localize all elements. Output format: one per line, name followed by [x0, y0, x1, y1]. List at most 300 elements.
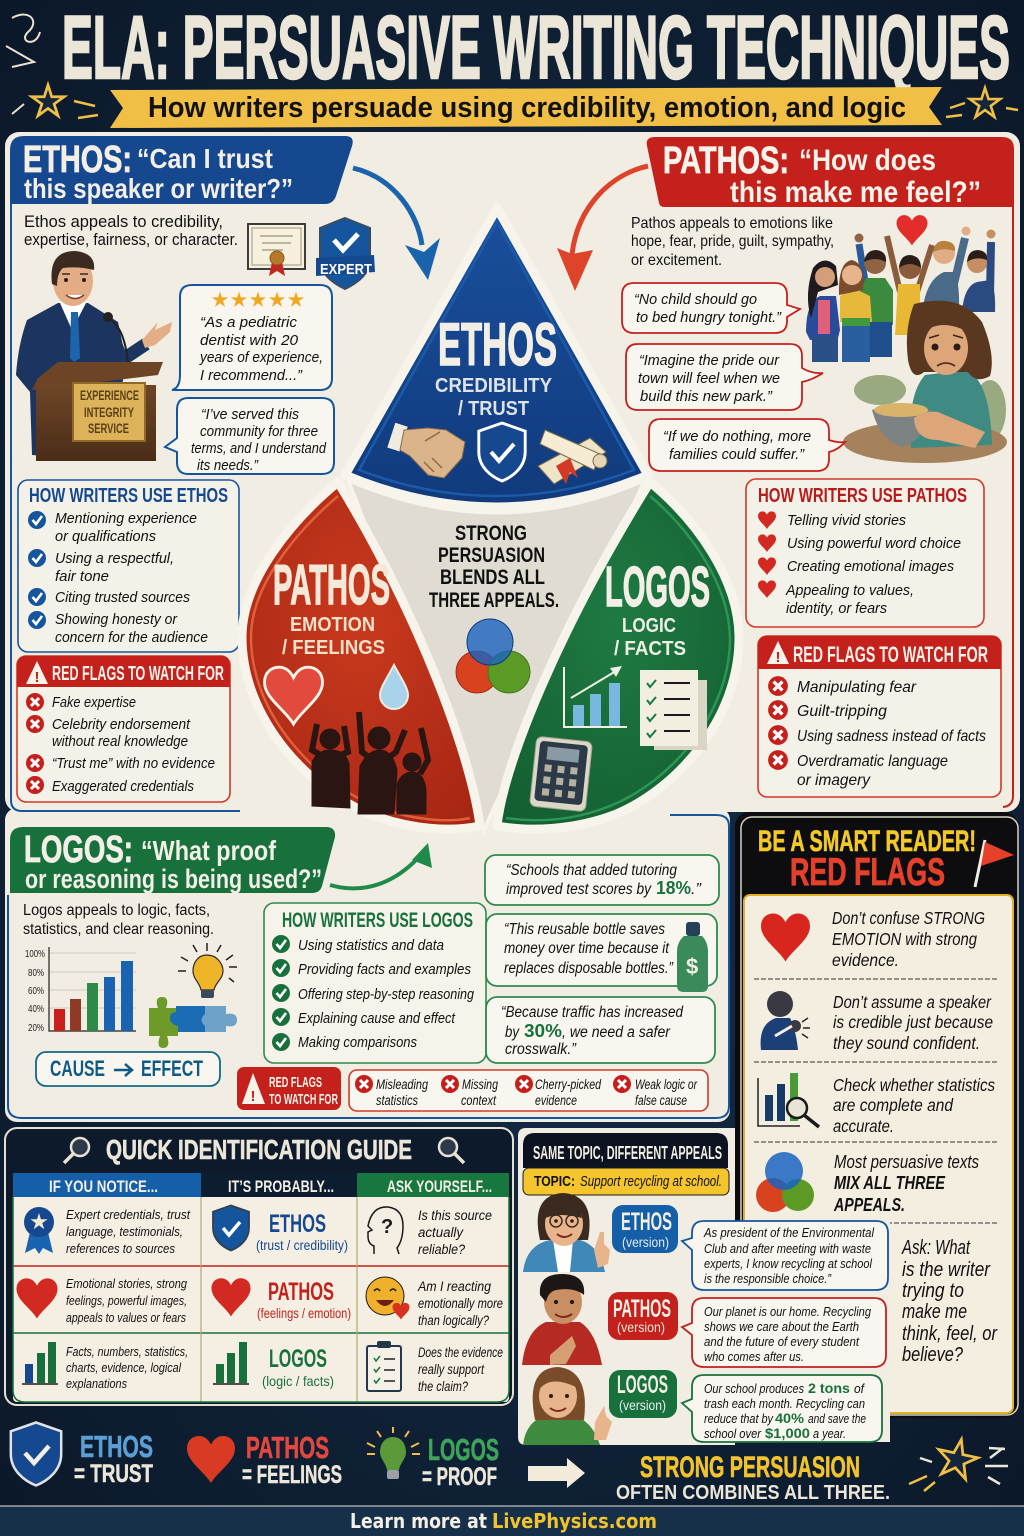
box: ethos red flags: Fake expertise: [52, 694, 136, 711]
same topic header: [523, 1133, 728, 1168]
segment: logos leaf: [497, 482, 739, 829]
icon: magnifier right: [439, 1138, 464, 1163]
icon: rising bar chart: [564, 666, 627, 727]
badge: ethos version: ETHOS: [621, 1208, 672, 1236]
icon: check shield: [479, 423, 525, 481]
tip: emotion: evidence.: [832, 950, 899, 970]
box: how writers use logos: Using statistics and data: [298, 937, 444, 954]
tip: emotion: [832, 908, 985, 970]
ask question: believe?: [902, 1344, 964, 1366]
icon: red flag: [975, 840, 1014, 887]
badge: ethos version: (version): [622, 1234, 669, 1250]
quote bubble: imagine the pride: “Imagine the pride our: [639, 352, 780, 369]
segment: logos leaf: LOGIC: [622, 615, 676, 637]
tip: emotion: EMOTION with strong: [832, 929, 977, 949]
panel: be a smart reader: RED FLAGS: [790, 851, 945, 894]
badge: pathos version: (version): [617, 1319, 665, 1335]
quote bubble: no child: [622, 283, 800, 333]
ethos header: “Can I trust: [137, 143, 273, 174]
row text: pathos signs: Emotional stories, strong: [66, 1276, 188, 1291]
quote: reusable bottle: money over time because it: [504, 940, 670, 957]
tip: statistics: are complete and: [833, 1095, 954, 1115]
bubble: pathos version text: Our planet is our home. Recycling: [704, 1305, 871, 1319]
bubble: logos version text: 2 tons: [808, 1380, 850, 1396]
box: how writers use logos: [264, 903, 486, 1063]
box: pathos red flags: [758, 636, 1001, 797]
logos red flags list: Misleading: [376, 1077, 428, 1092]
row text: ethos signs: [66, 1207, 191, 1256]
box: how writers use pathos: Appealing to values,: [785, 582, 914, 599]
logos red flags list: Missing: [462, 1077, 498, 1092]
quote: reusable bottle: [486, 914, 717, 992]
icon: bars: [22, 1342, 58, 1384]
icon: expert shield: EXPERT: [320, 261, 372, 278]
quote bubble: no child: to bed hungry tonight.”: [636, 309, 782, 326]
label: ethos: (trust / credibility): [256, 1237, 348, 1253]
bar chart: 100%: [25, 949, 45, 960]
bubble: logos version text: a year.: [813, 1427, 846, 1441]
pathos description: [631, 215, 834, 269]
row text: logos question: really support: [418, 1362, 485, 1377]
icon: clipboard checklist: [367, 1341, 401, 1391]
row text: pathos question: than logically?: [418, 1313, 489, 1328]
logos header: or reasoning is being used?”: [25, 864, 322, 894]
tip: mix all three: [833, 1152, 979, 1215]
logos red flags badge: RED FLAGS: [269, 1075, 322, 1091]
box: ethos red flags: Exaggerated credentials: [52, 778, 194, 795]
icon: award ribbon: [24, 1207, 54, 1254]
quote bubble: imagine the pride: build this new park.”: [640, 388, 773, 405]
icon: heart over crowd: [896, 215, 928, 246]
topic bar: TOPIC:: [534, 1173, 575, 1190]
logos red flags badge: !: [250, 1088, 256, 1105]
quote: traffic: 30%: [524, 1021, 562, 1041]
bubble: ethos version text: experts, I know recycling at school: [704, 1257, 873, 1271]
icon: red heart: [761, 913, 810, 962]
panel: pathos: [557, 137, 1014, 797]
summary: ethos equals trust: [11, 1422, 153, 1488]
row text: logos question: [418, 1345, 503, 1394]
illustration: speaker at lectern: SERVICE: [88, 421, 129, 436]
icon: tear drop: [380, 665, 408, 709]
segment: logos leaf: LOGOS: [605, 555, 710, 619]
icon: light bulb: [178, 943, 237, 998]
panel: quick identification guide: [5, 1128, 513, 1405]
box: how writers use logos: Making comparisons: [298, 1034, 417, 1051]
topic bar: [523, 1168, 729, 1195]
logos description: Logos appeals to logic, facts,: [23, 902, 210, 919]
badge: logos version: (version): [619, 1397, 666, 1413]
summary strip: [11, 1422, 1008, 1504]
panel: ethos: [10, 136, 440, 802]
label: logos: [262, 1345, 334, 1389]
centre blend area: THREE APPEALS.: [429, 589, 559, 612]
quote bubble: pediatric dentist: years of experience,: [199, 349, 323, 366]
arrow: to strong persuasion: [528, 1458, 585, 1488]
box: how writers use logos: HOW WRITERS USE LOGOS: [282, 909, 473, 932]
quote: traffic: by: [505, 1024, 520, 1041]
tip: statistics: [833, 1075, 995, 1136]
logos red flags list: evidence: [535, 1093, 577, 1108]
tip: confidence: they sound confident.: [833, 1033, 980, 1053]
tip: confidence: Don’t assume a speaker: [833, 992, 992, 1012]
icon: pathos heart: [212, 1278, 250, 1316]
bubble: ethos version text: Club and after meeting with waste: [704, 1242, 871, 1256]
box: ethos red flags: !: [34, 669, 40, 686]
icon: checklist: [640, 670, 707, 750]
illustration: student with glasses: [523, 1193, 610, 1272]
row text: ethos signs: language, testimonials,: [66, 1224, 183, 1239]
quote bubble: imagine the pride: [626, 344, 823, 410]
icon: heart: [16, 1278, 58, 1318]
segment: pathos leaf: PATHOS: [273, 553, 390, 617]
logos red flags list: Cherry-picked: [535, 1077, 601, 1092]
logos red flags list: [349, 1070, 708, 1111]
summary: ethos equals trust: ETHOS: [80, 1429, 153, 1464]
box: how writers use pathos: identity, or fears: [786, 600, 887, 617]
same topic header: SAME TOPIC, DIFFERENT APPEALS: [533, 1143, 722, 1163]
strong persuasion message: [616, 1451, 890, 1504]
quote bubble: served this community: community for three: [200, 423, 318, 440]
centre blend area: BLENDS ALL: [440, 566, 545, 589]
quote: traffic: crosswalk.”: [505, 1041, 577, 1058]
segment: pathos leaf: EMOTION: [290, 614, 375, 636]
row text: logos signs: [66, 1344, 188, 1391]
box: how writers use logos: Explaining cause and effect: [298, 1010, 456, 1027]
guide table: IF YOU NOTICE...: [49, 1177, 158, 1196]
box: pathos red flags: Guilt-tripping: [797, 703, 887, 720]
quote: tutoring: [485, 855, 719, 905]
cause and effect box: [36, 1052, 220, 1086]
ethos description: expertise, fairness, or character.: [24, 231, 238, 249]
box: how writers use ethos: or qualifications: [55, 528, 156, 545]
segment: pathos leaf: / FEELINGS: [282, 637, 385, 659]
icon: magnifier left: [64, 1138, 89, 1163]
icon: emotional face: [366, 1277, 410, 1320]
icon: thinking head: ?: [381, 1216, 393, 1238]
label: pathos: (feelings / emotion): [257, 1305, 351, 1321]
summary: pathos equals feelings: = FEELINGS: [242, 1461, 342, 1489]
footer bar: LivePhysics.com: [492, 1509, 657, 1533]
summary: pathos equals feelings: PATHOS: [246, 1430, 329, 1465]
box: ethos red flags: “Trust me” with no evidence: [52, 755, 215, 772]
logos description: [23, 902, 214, 938]
footer bar: [0, 1506, 1024, 1536]
row text: logos signs: charts, evidence, logical: [66, 1360, 182, 1375]
arrow: pathos to triangle: [557, 166, 648, 291]
row text: logos signs: explanations: [66, 1376, 127, 1391]
quote: tutoring: .”: [691, 881, 702, 898]
bubble: logos version text: 40%: [775, 1410, 805, 1426]
quote: traffic: [486, 997, 715, 1063]
quote bubble: if we do nothing: families could suffer.”: [669, 446, 805, 463]
logos red flags list: statistics: [376, 1093, 418, 1108]
tip: confidence: [833, 992, 993, 1053]
row text: ethos question: Is this source: [418, 1208, 492, 1223]
ethos description: Ethos appeals to credibility,: [24, 213, 223, 231]
row text: pathos question: emotionally more: [418, 1296, 503, 1311]
row text: logos signs: Facts, numbers, statistics,: [66, 1344, 188, 1359]
arrow: logos to leaf: [330, 843, 432, 888]
strong persuasion message: OFTEN COMBINES ALL THREE.: [616, 1482, 890, 1504]
row text: logos question: Does the evidence: [418, 1345, 503, 1360]
badge: logos version: LOGOS: [617, 1371, 668, 1399]
ethos header: this speaker or writer?”: [24, 173, 293, 204]
tip: mix all three: Most persuasive texts: [834, 1152, 979, 1172]
ethos header: [10, 136, 353, 204]
icon: expert shield: [316, 218, 375, 289]
row text: ethos question: reliable?: [418, 1242, 465, 1257]
pathos header: [647, 137, 1014, 209]
icon: water bottle: $: [686, 954, 698, 979]
badge: pathos version: PATHOS: [613, 1295, 671, 1323]
pathos header: “How does: [799, 144, 936, 177]
icon: thinking head: [368, 1207, 403, 1254]
box: how writers use pathos: Creating emotional images: [787, 558, 954, 575]
quote: reusable bottle: “This reusable bottle saves: [504, 921, 665, 938]
icon: puzzle pieces: [149, 997, 237, 1048]
box: pathos red flags: Overdramatic language: [797, 753, 948, 770]
box: how writers use pathos: [746, 479, 984, 627]
quote: reusable bottle: replaces disposable bottles.”: [504, 960, 674, 977]
pathos description: Pathos appeals to emotions like: [631, 215, 833, 232]
icon: water bottle: [677, 922, 708, 992]
bubble: logos version text: and save the: [808, 1412, 866, 1426]
quote bubble: served this community: terms, and I understand: [191, 440, 327, 457]
icon: ethos shield: [213, 1206, 249, 1250]
illustration: crowd silhouette: [312, 712, 428, 814]
bubble: pathos version text: who comes after us.: [704, 1350, 804, 1364]
icon: diploma: [538, 430, 607, 484]
label: ethos: ETHOS: [269, 1210, 326, 1238]
bubble: logos version text: [682, 1375, 882, 1442]
quote bubble: pediatric dentist: I recommend...”: [200, 367, 303, 384]
pathos description: hope, fear, pride, guilt, sympathy,: [631, 233, 834, 250]
bubble: pathos version text: shows we care about the Earth: [704, 1320, 859, 1334]
quote bubble: imagine the pride: town will feel when we: [638, 370, 780, 387]
logos header: [10, 827, 335, 894]
logos red flags badge: TO WATCH FOR: [269, 1092, 338, 1108]
row text: pathos signs: feelings, powerful images,: [66, 1293, 187, 1308]
bubble: ethos version text: is the responsible choice.”: [704, 1272, 832, 1286]
box: how writers use pathos: Telling vivid stories: [787, 512, 906, 529]
paper background: same topic panel: [518, 1128, 890, 1445]
summary: logos equals proof: = PROOF: [422, 1463, 497, 1491]
quote bubble: served this community: [165, 398, 334, 474]
tip: statistics: accurate.: [833, 1116, 894, 1136]
badge: logos version: [609, 1370, 677, 1418]
panel: ethos frame: [11, 204, 240, 811]
box: how writers use logos: Providing facts and examples: [298, 961, 471, 978]
box: pathos red flags: !: [776, 649, 780, 666]
pathos header: PATHOS:: [663, 140, 789, 182]
bubble: pathos version text: [682, 1298, 886, 1367]
segment: ethos triangle: CREDIBILITY: [435, 375, 553, 397]
quote: traffic: , we need a safer: [562, 1024, 671, 1041]
paper background: logos panel: [5, 808, 730, 1122]
centre blend area: PERSUASION: [438, 544, 545, 567]
illustration: speaker at lectern: EXPERIENCE: [80, 388, 139, 403]
ask question: is the writer: [902, 1259, 991, 1281]
logos header: “What proof: [141, 835, 277, 866]
box: how writers use ethos: fair tone: [55, 568, 109, 585]
strong persuasion message: STRONG PERSUASION: [640, 1451, 860, 1484]
row text: logos question: the claim?: [418, 1379, 468, 1394]
label: ethos: [256, 1210, 348, 1253]
pathos description: or excitement.: [631, 252, 722, 269]
bubble: logos version text: Our school produces: [704, 1382, 804, 1396]
box: how writers use logos: Offering step-by-step reasoning: [298, 986, 475, 1003]
segment: ethos triangle: / TRUST: [458, 398, 529, 420]
icon: burst star: [909, 1435, 1008, 1491]
panel: be a smart reader: [735, 812, 1018, 1418]
label: pathos: PATHOS: [268, 1278, 334, 1306]
box: ethos red flags: Celebrity endorsement: [52, 716, 191, 733]
footer bar: Learn more at: [350, 1509, 487, 1533]
quote bubble: pediatric dentist: dentist with 20: [200, 332, 299, 349]
quote bubble: served this community: “I’ve served this: [201, 406, 299, 423]
summary: logos equals proof: [367, 1427, 499, 1491]
quote bubble: if we do nothing: “If we do nothing, more: [663, 428, 811, 445]
bubble: logos version text: trash each month. Recycling can: [704, 1397, 865, 1411]
panel: logos: [8, 815, 729, 1118]
box: how writers use pathos: Using powerful word choice: [787, 535, 961, 552]
panel: pathos frame: [1003, 207, 1013, 807]
decoration: left sparkle and star: [6, 15, 98, 118]
logos red flags list: false cause: [635, 1093, 687, 1108]
tip: emotion: Don’t confuse STRONG: [832, 908, 985, 928]
ethos header: ETHOS:: [23, 139, 132, 181]
badge: pathos version: [608, 1292, 678, 1340]
row text: pathos question: [417, 1279, 503, 1328]
label: logos: LOGOS: [269, 1345, 327, 1373]
box: ethos red flags: RED FLAGS TO WATCH FOR: [52, 663, 224, 685]
bubble: logos version text: $1,000: [765, 1425, 810, 1441]
row text: pathos question: Am I reacting: [417, 1279, 491, 1294]
icon: calculator: [529, 736, 593, 812]
tip: confidence: is credible just because: [833, 1012, 993, 1032]
segment: pathos leaf: [242, 482, 480, 829]
row text: ethos signs: references to sources: [66, 1241, 175, 1256]
box: how writers use ethos: Showing honesty or: [55, 611, 178, 628]
quote: tutoring: improved test scores by: [506, 881, 652, 898]
box: pathos red flags: Using sadness instead of facts: [797, 728, 986, 745]
bar chart: [25, 947, 136, 1034]
box: ethos red flags: without real knowledge: [52, 733, 188, 750]
bubble: pathos version text: and the future of every student: [704, 1335, 859, 1349]
quote: tutoring: “Schools that added tutoring: [506, 862, 677, 879]
logos header: LOGOS:: [24, 829, 133, 871]
quote: tutoring: 18%: [656, 878, 691, 898]
box: how writers use ethos: Using a respectful,: [55, 550, 174, 567]
box: how writers use ethos: Mentioning experience: [55, 510, 197, 527]
row text: pathos signs: appeals to values or fears: [66, 1310, 186, 1325]
bar chart: 20%: [28, 1023, 44, 1034]
ask question: trying to: [902, 1280, 964, 1302]
bar chart: 40%: [28, 1004, 44, 1015]
tip: mix all three: MIX ALL THREE: [834, 1173, 946, 1193]
icon: venn diagram: [456, 619, 530, 693]
quote: traffic: “Because traffic has increased: [501, 1004, 684, 1021]
quote bubble: no child: “No child should go: [634, 291, 757, 308]
logos description: statistics, and clear reasoning.: [23, 921, 214, 938]
bubble: logos version text: reduce that by: [704, 1412, 774, 1426]
icon: certificate: [248, 224, 305, 276]
arrow: ethos to triangle: [353, 168, 440, 280]
ask question: think, feel, or: [902, 1323, 998, 1345]
panel: quick identification guide: QUICK IDENTIFICATION GUIDE: [106, 1134, 412, 1165]
row text: ethos question: [418, 1208, 492, 1257]
tip: mix all three: APPEALS.: [833, 1195, 905, 1215]
icon: confident speaker: [761, 991, 810, 1050]
ask question: Ask: What: [901, 1237, 971, 1259]
tip: statistics: Check whether statistics: [833, 1075, 995, 1095]
illustration: cheering crowd: [806, 226, 996, 362]
box: how writers use ethos: concern for the audience: [55, 629, 208, 646]
ethos description: [24, 213, 238, 249]
label: logos: (logic / facts): [262, 1373, 334, 1389]
box: pathos red flags: Manipulating fear: [797, 679, 917, 696]
bubble: logos version text: school over: [704, 1427, 762, 1441]
box: how writers use ethos: Citing trusted sources: [55, 589, 190, 606]
paper background: main panel: [5, 132, 1020, 812]
bubble: ethos version text: [682, 1221, 888, 1290]
ask question: make me: [902, 1301, 967, 1323]
icon: handshake: [387, 423, 465, 478]
decoration: right star: [946, 88, 1018, 117]
logos red flags badge: [237, 1067, 341, 1110]
row text: pathos signs: [66, 1276, 188, 1325]
subtitle banner: How writers persuade using credibility, emotion, and logic: [148, 92, 906, 124]
illustration: student in green: [523, 1367, 612, 1445]
quote bubble: served this community: its needs.”: [197, 457, 259, 474]
bar chart: 80%: [28, 968, 44, 979]
badge: ethos version: [612, 1205, 678, 1253]
centre blend area: STRONG: [455, 522, 527, 545]
icon: venn diagram small: [756, 1152, 814, 1212]
box: pathos red flags: or imagery: [797, 772, 871, 789]
summary: logos equals proof: LOGOS: [428, 1432, 499, 1467]
quote bubble: if we do nothing: [649, 419, 845, 471]
illustration: sad child with bowl: [843, 301, 1007, 463]
guide table: [13, 1173, 509, 1402]
quote bubble: pediatric dentist: “As a pediatric: [200, 314, 298, 331]
illustration: speaker at lectern: [16, 251, 172, 461]
segment: logos leaf: / FACTS: [614, 638, 686, 660]
segment: ethos triangle: [345, 208, 648, 507]
centre blend area: [348, 480, 645, 830]
bubble: ethos version text: As president of the Environmental: [703, 1226, 875, 1240]
bubble: logos version text: of: [854, 1382, 865, 1396]
cause and effect box: CAUSE: [50, 1056, 105, 1081]
icon: heart: [264, 667, 322, 724]
topic bar: Support recycling at school.: [580, 1173, 722, 1190]
summary: ethos equals trust: = TRUST: [74, 1460, 153, 1488]
panel: same topic different appeals: [522, 1133, 888, 1445]
box: how writers use ethos: HOW WRITERS USE ETHOS: [29, 485, 228, 507]
box: how writers use ethos: [18, 480, 239, 652]
illustration: student in red hoodie: [522, 1274, 602, 1365]
guide table: ASK YOURSELF...: [387, 1177, 492, 1196]
box: ethos red flags: [17, 656, 230, 802]
summary: pathos equals feelings: [187, 1430, 342, 1489]
bar chart: 60%: [28, 986, 44, 997]
icon: logos bars: [213, 1342, 249, 1384]
illustration: speaker at lectern: INTEGRITY: [84, 405, 134, 420]
quote bubble: pediatric dentist: [172, 285, 332, 390]
diagram: three appeals: [242, 208, 739, 830]
logos red flags list: Weak logic or: [635, 1077, 697, 1092]
